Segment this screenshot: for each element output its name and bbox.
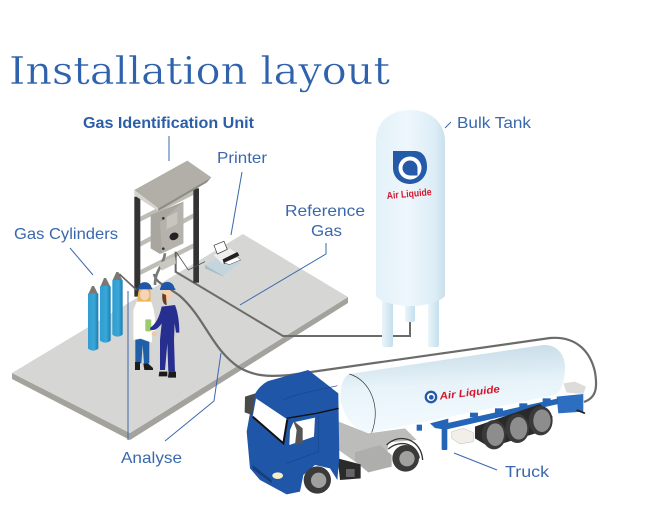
trailer wheels — [475, 404, 553, 449]
label: analyse: Analyse — [121, 450, 182, 467]
tanker brand text: Air Liquide — [438, 384, 501, 403]
analyse label line — [127, 291, 129, 440]
analyser cabinet — [151, 202, 183, 254]
cab details — [283, 386, 337, 463]
label: printer: Printer — [217, 150, 268, 167]
side mirror — [293, 420, 303, 445]
gas cylinders — [88, 272, 137, 351]
cylinder 1 — [88, 286, 98, 351]
tanker end seam — [349, 374, 375, 433]
label: truck — [454, 453, 550, 481]
reference gas pipe — [176, 272, 410, 336]
tanker logo — [425, 391, 437, 403]
label: reference gas — [240, 203, 365, 305]
tanker body — [341, 345, 565, 433]
chassis — [339, 422, 417, 472]
concrete platform — [12, 234, 348, 440]
truck — [245, 345, 586, 494]
Air Liquide logo — [393, 151, 427, 184]
side window — [289, 418, 315, 445]
trailer rear box — [557, 382, 586, 413]
tank brand text: Air Liquide — [386, 187, 432, 202]
rear wheel — [387, 439, 423, 472]
front wheel — [304, 466, 331, 494]
trailer frame — [417, 398, 558, 450]
storage crate — [452, 428, 473, 444]
label: printer — [217, 150, 268, 235]
label: gas identification unit: Gas Identification Unit — [83, 115, 254, 132]
windshield — [253, 398, 287, 443]
label: bulk tank: Bulk Tank — [457, 115, 532, 132]
cylinder 3 — [112, 272, 123, 337]
cab body — [247, 370, 339, 494]
technician in lab coat — [133, 282, 156, 370]
roof — [134, 161, 211, 208]
trailer — [341, 345, 586, 450]
flexible hose to truck — [154, 274, 596, 402]
label: truck: Truck — [505, 464, 550, 481]
label: gas cylinders: Gas Cylinders — [14, 226, 118, 243]
cross bars — [140, 190, 193, 275]
tank legs — [382, 298, 439, 347]
technicians — [133, 282, 179, 378]
label: analyse — [121, 353, 221, 467]
tank body — [376, 110, 445, 306]
label: reference gas: Reference — [285, 203, 365, 220]
printer — [205, 241, 241, 277]
label: gas cylinders — [14, 226, 118, 275]
fuel tank — [355, 445, 392, 472]
grille — [253, 465, 272, 483]
cab roof band — [287, 408, 339, 418]
support posts — [134, 188, 199, 297]
front mirror — [245, 393, 255, 415]
technician in navy overalls — [150, 282, 179, 378]
label: reference gas: Gas — [311, 223, 342, 240]
step — [338, 458, 361, 480]
headlight — [272, 472, 283, 479]
cylinder 2 — [100, 278, 111, 343]
bulk tank — [376, 110, 445, 347]
cylinder connection hose — [119, 274, 137, 290]
tractor unit — [245, 370, 423, 494]
gas identification unit — [134, 161, 211, 297]
title: Installation layout — [9, 49, 391, 94]
cabinet cables — [155, 253, 165, 285]
